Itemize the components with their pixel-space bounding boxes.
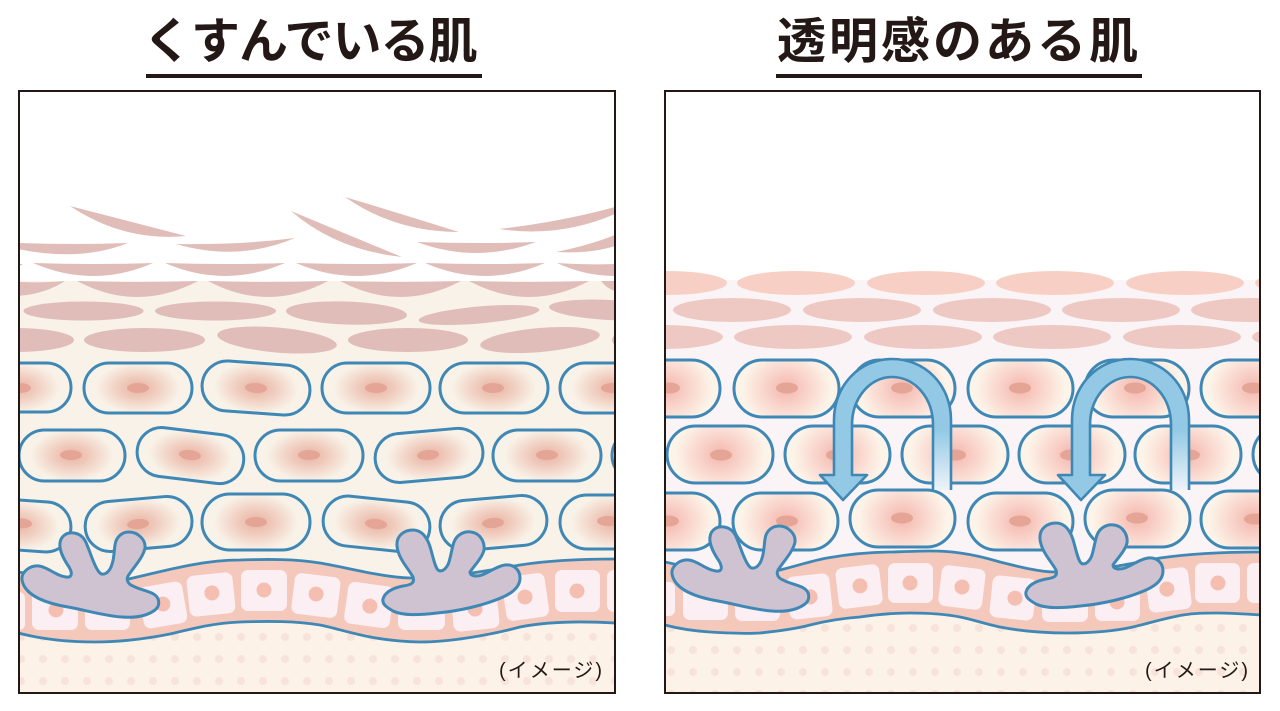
image note, translucent skin: (イメージ) [1145,660,1248,682]
panel: translucent skin diagram [664,90,1261,694]
epidermal cells, dull skin [20,360,614,554]
panel border, dull skin [19,91,615,693]
basal cells, translucent skin [650,563,1280,622]
horny layer flakes, translucent skin [666,271,1259,349]
panel: dull skin diagram [18,90,616,694]
arrow: turnover right [1058,359,1189,500]
melanocyte right, translucent skin [1026,523,1163,608]
basal cells, dull skin [8,570,647,632]
melanocyte left, translucent skin [672,526,809,611]
basal membrane, translucent skin [650,551,1280,700]
image note, dull skin: (イメージ) [499,660,602,682]
melanocyte right, dull skin [383,530,520,615]
title: dull skin: くすんでいる肌 [143,15,477,69]
melanocyte left, dull skin [22,532,159,617]
epidermal cells, translucent skin [615,360,1280,550]
panel border, translucent skin [665,91,1260,693]
arrow: turnover left [820,359,951,500]
horny layer flakes, dull skin [20,197,614,354]
basal membrane, dull skin [20,558,614,692]
title: translucent skin: 透明感のある肌 [777,15,1141,69]
